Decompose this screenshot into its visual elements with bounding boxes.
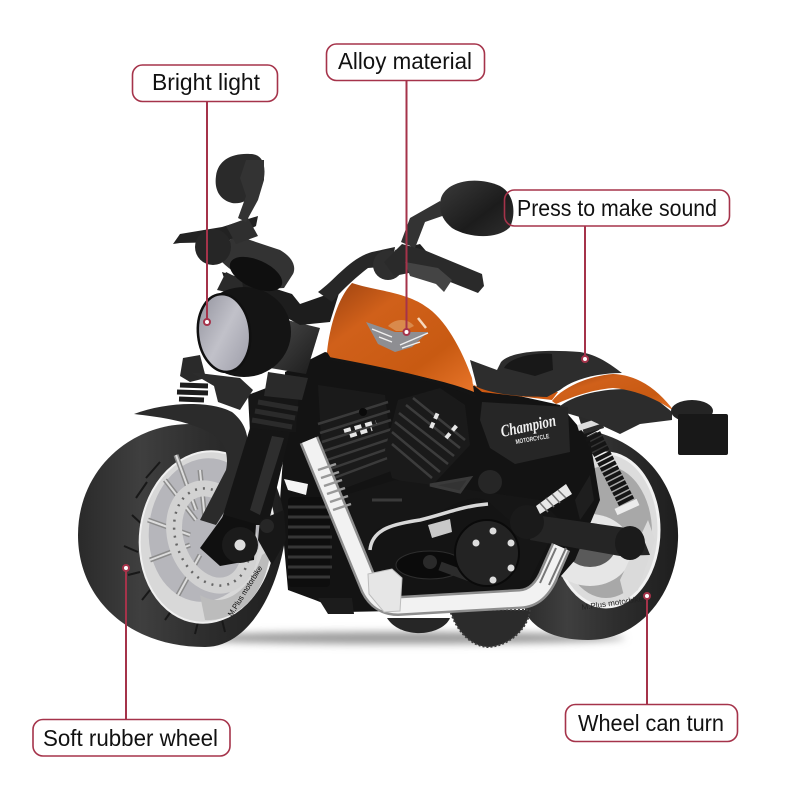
triple clamp and handlebar left rise [222,244,432,325]
callout: Soft rubber wheel: Soft rubber wheel [43,725,218,751]
left handlebar lever and grip [173,216,258,265]
left mirror [216,154,264,222]
tail light and license plate [671,400,728,455]
front axle hub [200,515,256,566]
orange stripe and rear fender [472,374,674,411]
right handlebar and grip [384,201,484,293]
tank wing emblem [366,320,428,352]
fuel tank [326,283,476,396]
callout: Bright light: Bright light [152,69,261,95]
rear wheel [520,432,678,640]
front cylinder [318,385,394,490]
crankcase [345,480,560,585]
chrome exhaust pipes [309,440,566,612]
side panel with Champion logo: Champion [499,411,558,441]
front wheel: M.Plus motorbike [226,564,265,618]
callout: Press to make sound: Press to make sound [517,195,717,221]
brake caliper [258,510,286,565]
lower bracket under headlight [190,372,253,410]
headlight [194,272,291,377]
rear wheel: M.Plus motorbike [581,594,644,612]
motorcycle illustration [78,154,728,647]
rear shock absorber [576,405,638,512]
callout: Wheel can turn: Wheel can turn [578,710,724,736]
right mirror [440,181,513,236]
ground shadow [175,632,625,644]
front wheel [78,424,285,647]
callout: Press to make sound [504,190,730,362]
gauge cluster [222,236,294,298]
derby cover with screws [455,520,519,586]
white gap behind fork [284,479,308,495]
swingarm and drive linkage [478,470,650,560]
callout: Alloy material: Alloy material [338,48,472,74]
left fork stub [180,355,206,382]
side panel with Champion logo: MOTORCYCLE [515,433,550,446]
callout: Soft rubber wheel [33,565,230,756]
main dark frame and engine mass [280,352,600,612]
callout: Alloy material [326,44,484,335]
rear cylinder [385,388,470,490]
primary cover with chrome trim [368,498,520,590]
front fender [134,404,248,525]
gear teeth below engine [387,610,530,647]
radiator [288,497,354,614]
callout: Wheel can turn [566,593,738,742]
rear fender lower panel [556,389,672,434]
seat [470,351,622,397]
front fork [177,320,320,566]
side panel with Champion logo [480,402,570,464]
callout: Bright light [132,65,278,325]
